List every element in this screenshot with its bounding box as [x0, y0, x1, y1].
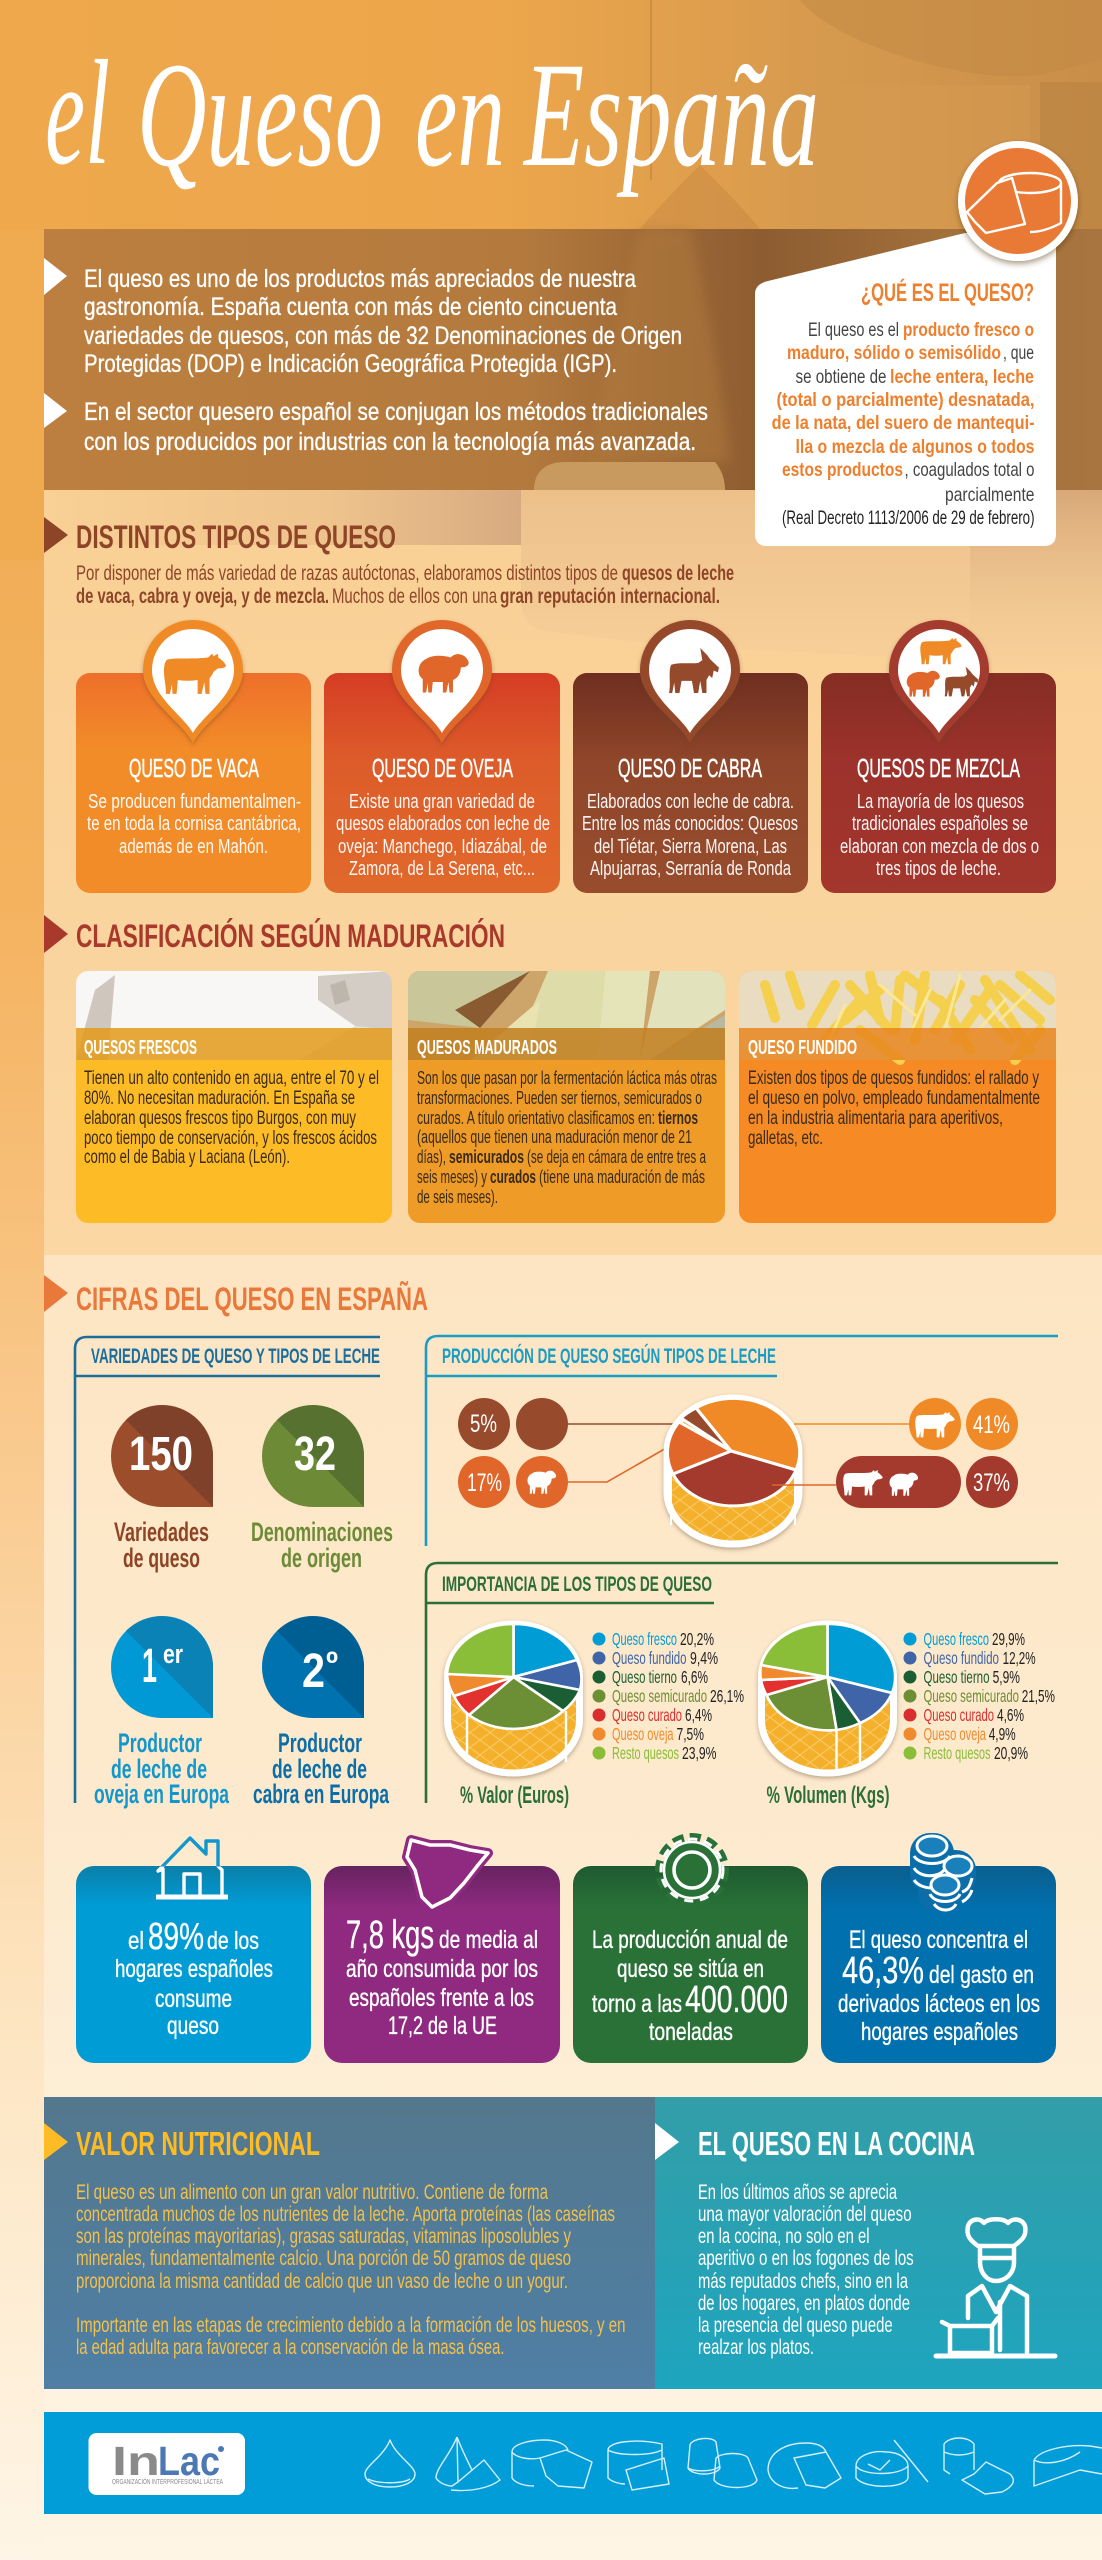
body text: Tienen un alto contenido en agua, entre el 70 y el — [84, 1068, 379, 1089]
body text: en la industria alimentaria para aperitivos, — [748, 1108, 1003, 1129]
panel: producción según tipos de leche — [426, 1336, 1058, 1546]
legend: volumen: 29,9% — [992, 1629, 1025, 1649]
photo: cured cheese wedges — [408, 971, 725, 1060]
card text — [346, 1913, 538, 2040]
card text: tres tipos de leche. — [876, 858, 1001, 880]
card text: te en toda la cornisa cantábrica, — [87, 813, 301, 835]
icon: mixed animals pin — [889, 620, 989, 743]
legend: volumen: 4,6% — [997, 1705, 1024, 1725]
title — [45, 30, 819, 198]
heading: cifras: CIFRAS DEL QUESO EN ESPAÑA — [76, 1281, 428, 1317]
definition text: leche entera, leche — [890, 366, 1034, 388]
legend: valor: 9,4% — [690, 1648, 718, 1668]
stat: goat 5% — [458, 1398, 568, 1450]
card text: consume — [155, 1985, 232, 2013]
card text: queso — [167, 2012, 219, 2040]
logo: InLac: ORGANIZACIÓN INTERPROFESIONAL LÁCTEA — [112, 2477, 223, 2486]
body text: días), — [417, 1146, 446, 1167]
card text: Elaborados con leche de cabra. — [587, 791, 794, 813]
intro paragraph 2: En el sector quesero español se conjugan los métodos tradicionales — [84, 398, 708, 426]
definition text — [772, 319, 1035, 529]
legend: valor: Queso tierno — [612, 1667, 677, 1687]
definition text: producto fresco o — [903, 319, 1034, 341]
card text: El queso concentra el — [849, 1926, 1028, 1954]
definition text: lla o mezcla de algunos o todos — [796, 436, 1035, 458]
cocina text: una mayor valoración del queso — [698, 2202, 912, 2226]
body text: de seis meses). — [417, 1186, 498, 1207]
card text: Se producen fundamentalmen- — [88, 791, 301, 813]
stat drop: 1er: er — [163, 1639, 183, 1669]
card text: 46,3% — [842, 1950, 924, 1992]
legend: volumen: Resto quesos — [924, 1743, 991, 1763]
footer band — [44, 2412, 1102, 2514]
card text: hogares españoles — [115, 1955, 273, 1983]
body text: 80%. No necesitan maduración. En España se — [84, 1088, 355, 1109]
pie chart: valor — [447, 1624, 581, 1773]
icon: section arrow — [44, 517, 68, 553]
icon: section arrow — [655, 2123, 679, 2160]
legend: valor: 23,9% — [682, 1743, 716, 1763]
card: queso fundido — [739, 971, 1056, 1223]
intro paragraph 2: con los producidos por industrias con la tecnología más avanzada. — [84, 428, 696, 456]
icon: coins — [910, 1833, 976, 1912]
title: España — [523, 32, 819, 198]
card heading: QUESO DE CABRA — [618, 753, 762, 783]
stat drop: 2o: 2 — [302, 1645, 325, 1698]
body text: (tiene una maduración de más — [539, 1166, 705, 1187]
card: quesos madurados — [408, 971, 725, 1223]
panel heading: PRODUCCIÓN DE QUESO SEGÚN TIPOS DE LECHE — [442, 1344, 776, 1368]
legend: valor: Queso oveja — [612, 1724, 674, 1744]
card: quesos de mezcla — [821, 620, 1056, 893]
intro text: tipos: gran reputación internacional. — [500, 585, 720, 608]
cocina text: la presencia del queso puede — [698, 2313, 893, 2337]
stat label: de origen — [281, 1543, 362, 1573]
card text: 17,2 de la UE — [388, 2012, 497, 2040]
cocina text: realzar los platos. — [698, 2335, 814, 2359]
card text: del Tiétar, Sierra Morena, Las — [594, 836, 787, 858]
intro paragraph 1: gastronomía. España cuenta con más de ciento cincuenta — [84, 293, 617, 321]
card text: Existe una gran variedad de — [349, 791, 535, 813]
logo: InLac: Lac — [158, 2438, 220, 2484]
cheese pie chart — [667, 1398, 836, 1544]
card text: torno a las — [592, 1990, 682, 2018]
card text: toneladas — [649, 2018, 733, 2046]
card text: quesos elaborados con leche de — [336, 813, 550, 835]
panel: importancia de los tipos de queso — [426, 1563, 1058, 1809]
legend: valor: 20,2% — [680, 1629, 714, 1649]
card text: de los — [207, 1927, 259, 1955]
card text — [582, 791, 798, 880]
icon: section arrow — [44, 915, 68, 953]
pie chart: volumen — [760, 1624, 895, 1773]
card text: además de en Mahón. — [119, 836, 268, 858]
body text: tiernos — [658, 1107, 698, 1128]
heading: QUESOS MADURADOS — [417, 1037, 557, 1059]
icon: map of Spain — [407, 1840, 488, 1907]
section: clasificación según maduración — [44, 915, 505, 954]
intro paragraph 1: Protegidas (DOP) e Indicación Geográfica Protegida (IGP). — [84, 350, 617, 378]
legend: valor: 26,1% — [710, 1686, 744, 1706]
photo: fresh cheese — [76, 971, 392, 1060]
nutrition text: Importante en las etapas de crecimiento debido a la formación de los huesos, y en — [76, 2313, 626, 2337]
photo: shredded cheese — [739, 971, 1056, 1060]
legend: valor — [592, 1629, 744, 1763]
card: 400.000 toneladas — [573, 1837, 808, 2063]
intro paragraph 1: El queso es uno de los productos más apreciados de nuestra — [84, 265, 636, 293]
pie label: valor: % Valor (Euros) — [460, 1782, 569, 1809]
legend: valor: Queso fresco — [612, 1629, 677, 1649]
definition text: , coagulados total o — [904, 459, 1035, 481]
stat label — [253, 1728, 390, 1809]
definition text: maduro, sólido o semisólido — [787, 342, 1001, 364]
stat label: Productor — [118, 1728, 202, 1758]
cocina text: en la cocina, no solo en el — [698, 2224, 870, 2248]
definition text: (total o parcialmente) desnatada, — [776, 389, 1034, 411]
pie label: volumen: % Volumen (Kgs) — [766, 1782, 890, 1809]
stat: mixed 37%: 37% — [973, 1469, 1010, 1497]
title: el — [45, 30, 110, 196]
card text — [840, 791, 1039, 880]
stat: mixed 37% — [836, 1456, 1018, 1508]
card text — [115, 1916, 273, 2040]
stat label: Denominaciones — [251, 1517, 393, 1547]
stat drop: 150: 150 — [129, 1428, 193, 1481]
cocina text — [698, 2180, 914, 2359]
logo: InLac — [88, 2433, 245, 2495]
body text — [84, 1068, 379, 1168]
body text: (aquellos que tienen una maduración menor de 21 — [417, 1126, 692, 1147]
legend: volumen: Queso fresco — [924, 1629, 989, 1649]
intro text: tipos: de vaca, cabra y oveja, y de mezcla. — [76, 585, 329, 608]
icon: chef — [936, 2219, 1055, 2356]
body text: elaboran quesos frescos tipo Burgos, con muy — [84, 1108, 356, 1129]
legend: valor: 7,5% — [676, 1724, 704, 1744]
icon: goat pin — [640, 620, 740, 743]
title: en — [415, 32, 505, 198]
legend: valor: Resto quesos — [612, 1743, 679, 1763]
logo: InLac: In — [112, 2438, 160, 2484]
intro text: tipos — [76, 562, 734, 608]
heading: QUESOS FRESCOS — [84, 1037, 197, 1059]
legend: valor: Queso semicurado — [612, 1686, 707, 1706]
legend: volumen: Queso tierno — [924, 1667, 990, 1687]
card text: La mayoría de los quesos — [857, 791, 1024, 813]
section: cifras del queso — [44, 1275, 428, 1317]
stat drop: 1er: 1 — [142, 1640, 157, 1693]
icon: intro arrow 1 — [44, 258, 67, 295]
intro text: tipos: Por disponer de más variedad de razas autóctonas, elaboramos distintos tipos de — [76, 562, 618, 585]
panel: qué es el queso — [755, 141, 1078, 546]
card text: hogares españoles — [861, 2018, 1018, 2046]
stat label: oveja en Europa — [94, 1779, 230, 1809]
icon: cow pin — [143, 620, 243, 743]
nutrition text: proporciona la misma cantidad de calcio que un vaso de leche o un yogur. — [76, 2269, 568, 2293]
stat label: Variedades — [114, 1517, 209, 1547]
card text: 89% — [148, 1916, 204, 1958]
card: queso de vaca — [76, 620, 311, 893]
card text: La producción anual de — [592, 1926, 788, 1954]
stat: sheep 17% — [458, 1456, 568, 1508]
panel: variedades de queso — [75, 1337, 393, 1809]
intro paragraph 1: variedades de quesos, con más de 32 Denominaciones de Origen — [84, 322, 682, 350]
stat label: de queso — [123, 1543, 200, 1573]
card text: año consumida por los — [346, 1955, 538, 1983]
stat: cow 41%: 41% — [973, 1411, 1010, 1439]
intro paragraph 1 — [84, 265, 682, 378]
section: distintos tipos de queso — [44, 517, 734, 608]
card text: 7,8 kgs — [346, 1913, 434, 1957]
cocina text: de los hogares, en platos donde — [698, 2291, 910, 2315]
heading: clasificación: CLASIFICACIÓN SEGÚN MADURACIÓN — [76, 918, 505, 954]
stat: goat 5%: 5% — [470, 1410, 497, 1438]
nutrition text: la edad adulta para favorecer a la conservación de la masa ósea. — [76, 2335, 504, 2359]
legend: volumen: 5,9% — [993, 1667, 1020, 1687]
body text: curados. A título orientativo clasificamos en: — [417, 1107, 655, 1128]
card: 89% hogares — [76, 1838, 311, 2063]
heading: cocina: EL QUESO EN LA COCINA — [698, 2125, 975, 2162]
nutrition text: son las proteínas mayoritarias), grasas saturadas, vitaminas liposolubles y — [76, 2224, 571, 2248]
nutrition text: concentrada muchos de los nutrientes de la leche. Aporta proteínas (las caseínas — [76, 2202, 615, 2226]
definition text: , que — [1003, 342, 1034, 364]
card: queso de cabra — [573, 620, 808, 893]
legend: valor: 6,4% — [685, 1705, 712, 1725]
body text — [748, 1068, 1040, 1149]
stat: sheep 17%: 17% — [467, 1469, 502, 1497]
stat label: de leche de — [272, 1754, 367, 1784]
definition text: El queso es el — [808, 319, 899, 341]
intro text: tipos: quesos de leche — [622, 562, 734, 585]
panel: valor nutricional — [44, 2097, 655, 2389]
stat label — [94, 1728, 230, 1809]
stat label: cabra en Europa — [253, 1779, 390, 1809]
title: Queso — [137, 32, 383, 198]
card text — [87, 791, 301, 858]
nutrition text — [76, 2180, 626, 2359]
stat drop: 2o: º — [326, 1645, 338, 1683]
legend: valor: 6,6% — [681, 1667, 708, 1687]
card text: Zamora, de La Serena, etc... — [349, 858, 535, 880]
stat drop: 2o — [262, 1616, 364, 1718]
body text: como el de Babia y Laciana (León). — [84, 1147, 290, 1168]
cocina text: más reputados chefs, sino en la — [698, 2269, 908, 2293]
lower photo block — [44, 490, 1102, 680]
nutrition text: El queso es un alimento con un gran valor nutritivo. Contiene de forma — [76, 2180, 548, 2204]
card text — [336, 791, 550, 880]
heading: QUESO FUNDIDO — [748, 1037, 857, 1059]
body text: transformaciones. Pueden ser tiernos, semicurados o — [417, 1087, 702, 1108]
legend: volumen — [904, 1629, 1055, 1763]
nutrition text: minerales, fundamentalmente calcio. Una porción de 50 gramos de queso — [76, 2246, 571, 2270]
cocina text: aperitivo o en los fogones de los — [698, 2246, 914, 2270]
card text: de media al — [439, 1926, 538, 1954]
legend: volumen: Queso semicurado — [924, 1686, 1019, 1706]
definition text: parcialmente — [945, 484, 1034, 506]
definition text: se obtiene de — [796, 366, 886, 388]
panel heading: IMPORTANCIA DE LOS TIPOS DE QUESO — [442, 1573, 712, 1596]
connector lines — [568, 1424, 909, 1482]
heading: distintos tipos: DISTINTOS TIPOS DE QUESO — [76, 519, 396, 555]
legend: volumen: Queso curado — [924, 1705, 994, 1725]
stat label: Productor — [278, 1728, 362, 1758]
stat drop: 32 — [262, 1405, 364, 1507]
legend: valor: Queso curado — [612, 1705, 682, 1725]
body text: Son los que pasan por la fermentación láctica más otras — [417, 1067, 717, 1088]
card text: oveja: Manchego, Idiazábal, de — [338, 836, 547, 858]
legend: volumen: 21,5% — [1022, 1686, 1055, 1706]
card heading: QUESO DE OVEJA — [372, 753, 513, 783]
panel heading: VARIEDADES DE QUESO Y TIPOS DE LECHE — [91, 1345, 380, 1368]
card text: el — [128, 1927, 144, 1955]
legend: volumen: Queso oveja — [924, 1724, 986, 1744]
card text — [592, 1926, 788, 2046]
icon: sheep pin — [392, 620, 492, 743]
card text: derivados lácteos en los — [838, 1990, 1040, 2018]
icon: intro arrow 2 — [44, 393, 67, 428]
card heading: QUESO DE VACA — [129, 753, 259, 783]
card text: españoles frente a los — [349, 1984, 534, 2012]
stat label — [114, 1517, 209, 1573]
body text — [417, 1067, 717, 1207]
icon: house — [156, 1838, 228, 1897]
card: 7,8 kgs — [324, 1840, 560, 2063]
card text: 400.000 — [685, 1979, 788, 2021]
card text: elaboran con mezcla de dos o — [840, 836, 1039, 858]
card text: tradicionales españoles se — [852, 813, 1028, 835]
body text: seis meses) y — [417, 1166, 487, 1187]
card text: queso se sitúa en — [617, 1955, 764, 1983]
body text: galletas, etc. — [748, 1128, 823, 1149]
body text: curados — [490, 1166, 536, 1187]
stat: cow 41% — [909, 1398, 1018, 1450]
panel: el queso en la cocina — [655, 2097, 1102, 2389]
stat drop: 150 — [111, 1405, 213, 1507]
stat drop: 32: 32 — [294, 1428, 336, 1481]
cocina text: En los últimos años se aprecia — [698, 2180, 897, 2204]
legend: valor: Queso fundido — [612, 1648, 686, 1668]
intro text: tipos: Muchos de ellos con una — [332, 585, 497, 608]
stat drop: 1er — [111, 1616, 213, 1718]
icon: section arrow — [44, 2123, 68, 2160]
body text: (se deja en cámara de entre tres a — [527, 1146, 706, 1167]
card text: Alpujarras, Serranía de Ronda — [590, 858, 792, 880]
definition text: de la nata, del suero de mantequi- — [772, 412, 1035, 434]
card text: del gasto en — [929, 1961, 1034, 1989]
icons: cheese outlines — [365, 2437, 1102, 2494]
legend: volumen: 4,9% — [989, 1724, 1016, 1744]
card: quesos frescos — [76, 971, 392, 1223]
intro paragraph 2 — [84, 398, 708, 456]
card: queso de oveja — [324, 620, 560, 893]
card text — [838, 1926, 1040, 2046]
heading: valor nutricional: VALOR NUTRICIONAL — [76, 2125, 320, 2162]
stat label: de leche de — [111, 1754, 207, 1784]
body text: semicurados — [449, 1146, 524, 1167]
definition text: estos productos — [782, 459, 903, 481]
intro band — [44, 229, 1102, 490]
icon: cheese badge — [958, 141, 1078, 261]
icon: gear — [659, 1837, 725, 1903]
icon: section arrow — [44, 1275, 68, 1312]
legend: volumen: Queso fundido — [924, 1648, 999, 1668]
body text: poco tiempo de conservación, y los frescos ácidos — [84, 1128, 377, 1149]
card text: Entre los más conocidos: Quesos — [582, 813, 798, 835]
card: 46,3% gasto — [821, 1833, 1056, 2063]
legend: volumen: 20,9% — [994, 1743, 1028, 1763]
legend: volumen: 12,2% — [1003, 1648, 1036, 1668]
header cheese photo — [640, 0, 1102, 232]
stat label — [251, 1517, 393, 1573]
